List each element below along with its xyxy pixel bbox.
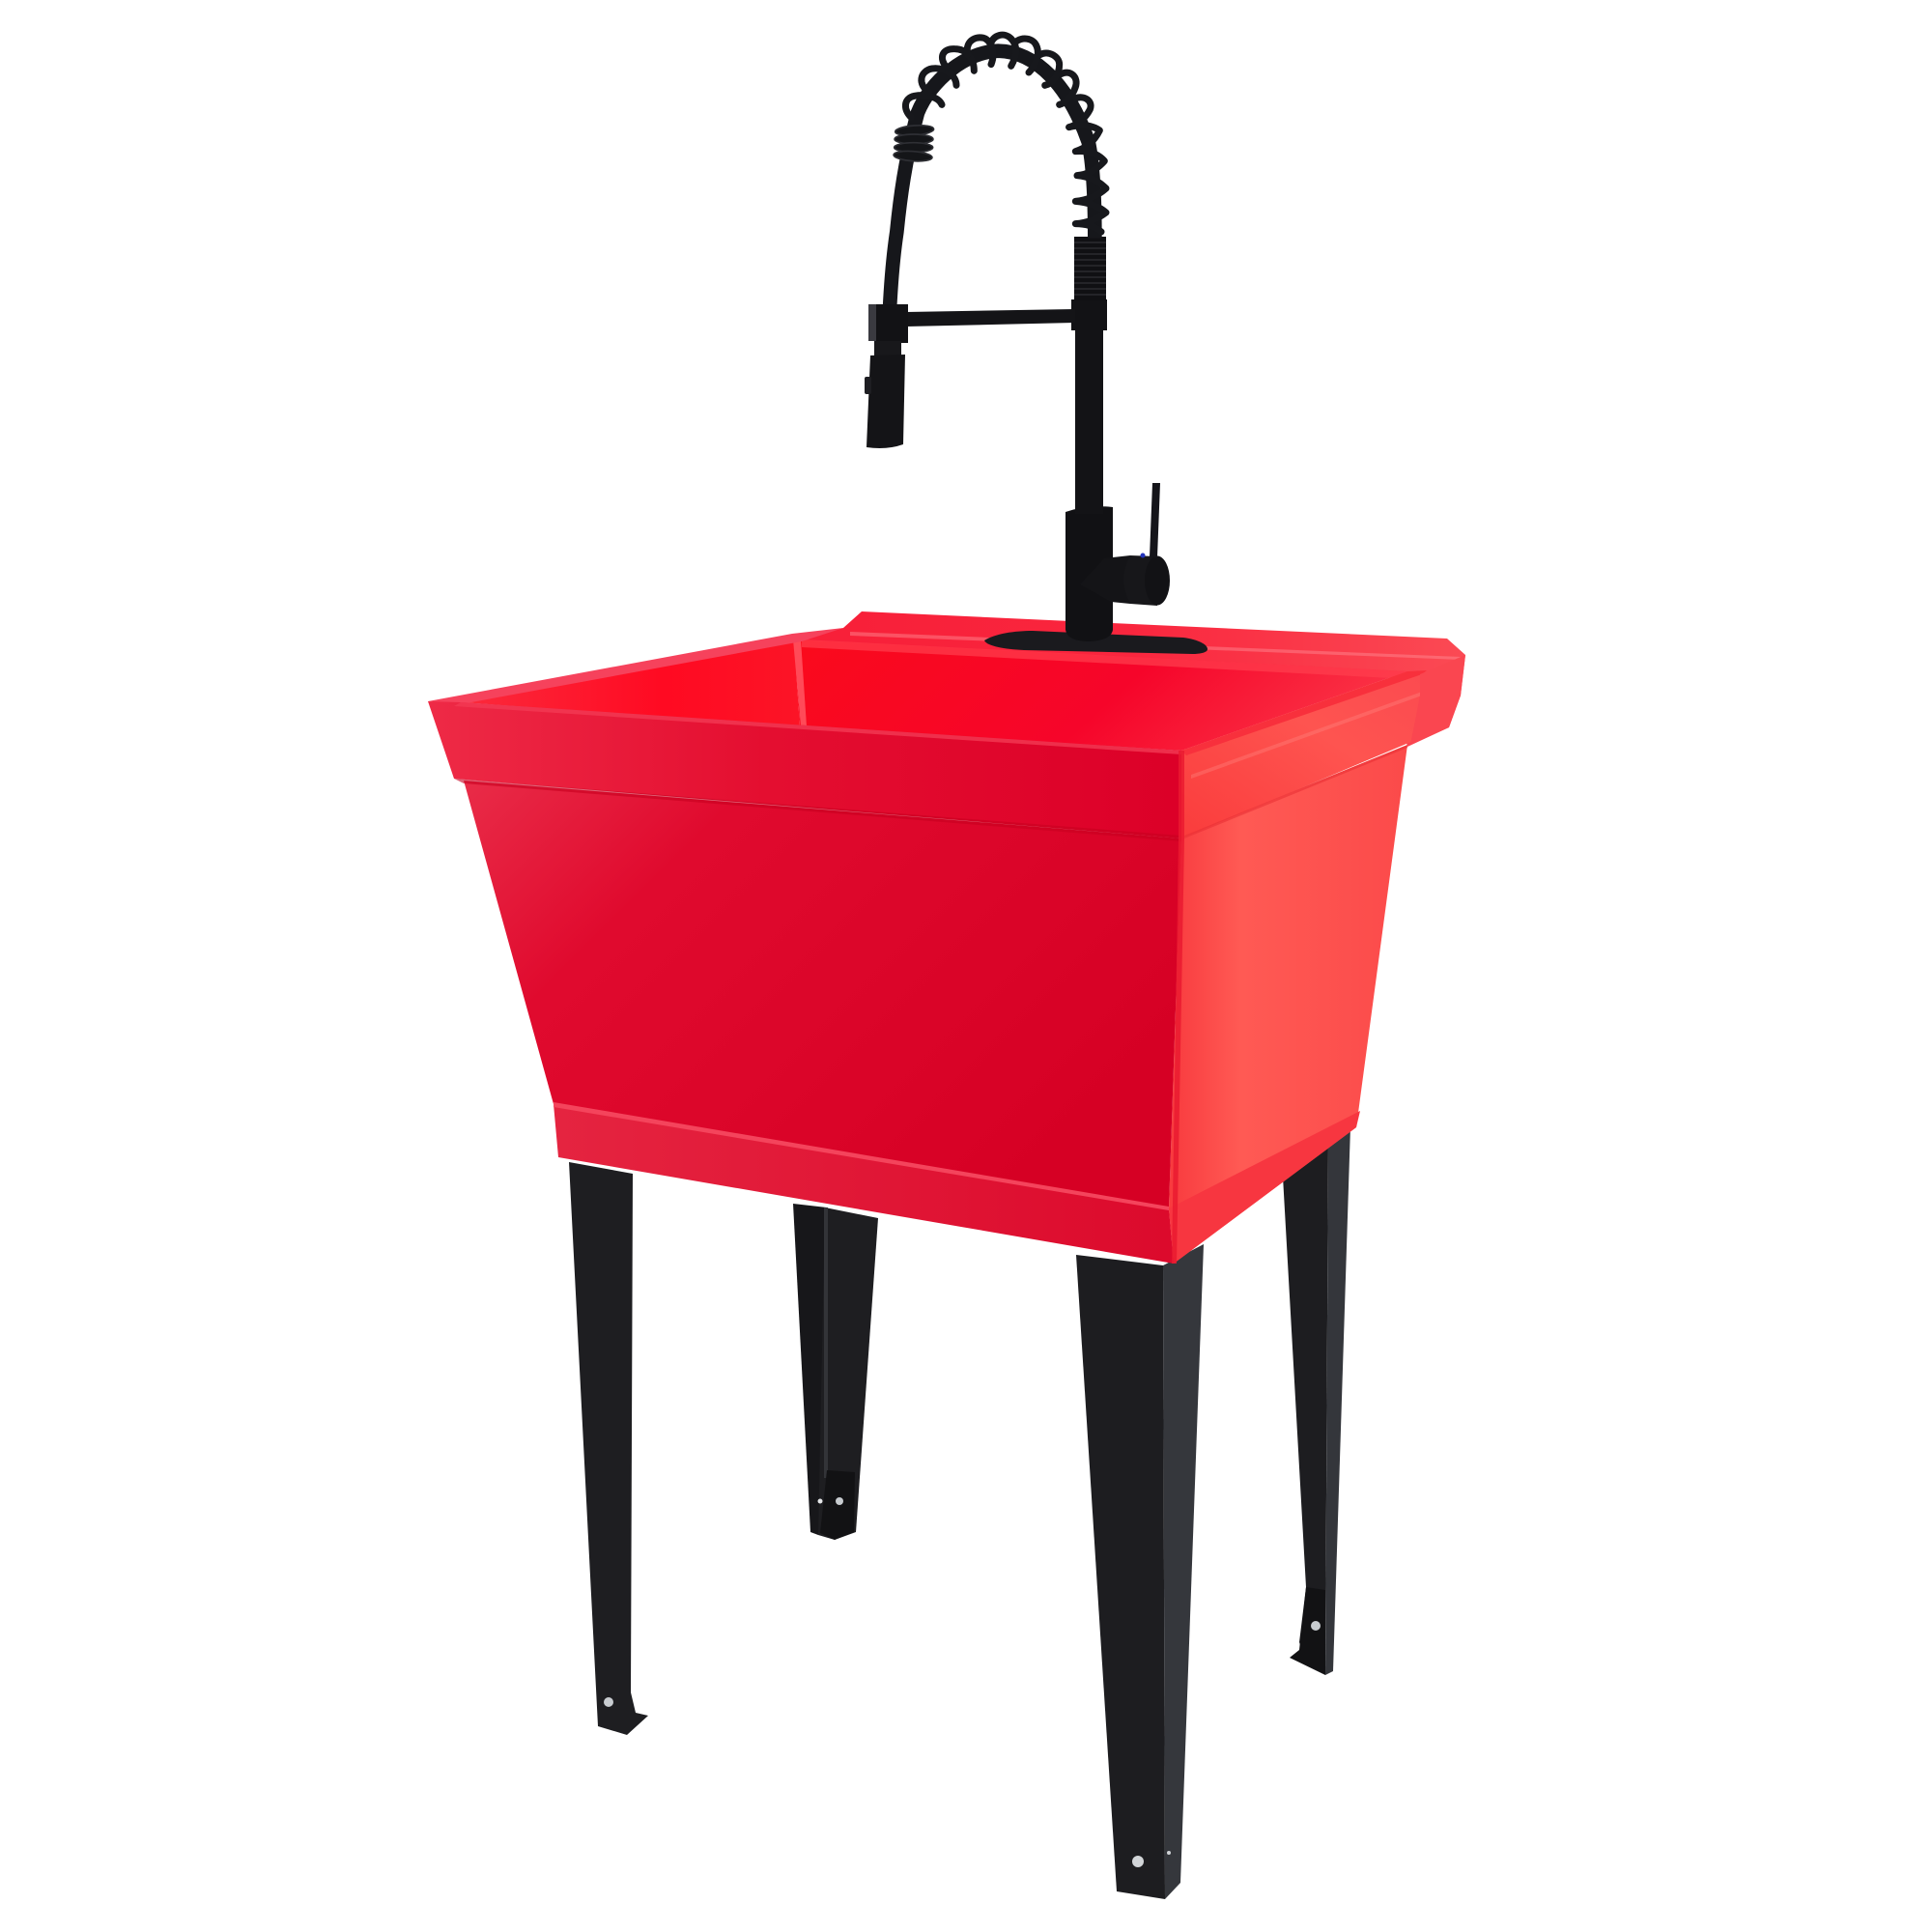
stem bbox=[1075, 328, 1103, 514]
back right leg bbox=[1283, 1126, 1350, 1675]
corner edge bbox=[1172, 751, 1184, 1264]
front right leg bbox=[1076, 1244, 1204, 1899]
tight coil on hose bbox=[894, 125, 934, 162]
lower band side bbox=[1169, 1111, 1360, 1264]
handle cylinder bbox=[1123, 555, 1170, 606]
right rim pale stripe bbox=[1191, 692, 1422, 779]
neck hose bbox=[890, 51, 1094, 309]
rim top left bbox=[428, 628, 843, 704]
front rim panel bbox=[428, 701, 1181, 838]
faucet bbox=[865, 35, 1208, 654]
ribbed spring base bbox=[1074, 237, 1106, 300]
front rim top highlight bbox=[454, 702, 1181, 754]
front body face bbox=[464, 781, 1181, 1208]
faucet base body bbox=[1065, 506, 1113, 641]
back ledge bbox=[794, 611, 1465, 747]
ledge pale highlight bbox=[850, 632, 1462, 660]
sprayer head bbox=[865, 355, 905, 448]
sink tub bbox=[428, 611, 1465, 1264]
back left leg bbox=[793, 1204, 878, 1540]
handle blue dot bbox=[1140, 553, 1146, 558]
handle lever bbox=[1150, 483, 1160, 557]
right body side bbox=[1169, 745, 1407, 1264]
handle connector bbox=[1080, 555, 1130, 604]
right rim panel bbox=[1181, 670, 1427, 838]
rim lower line bbox=[1184, 745, 1407, 838]
spring arches bbox=[905, 35, 1106, 232]
sprayer neck bbox=[874, 341, 901, 356]
lower band front bbox=[554, 1104, 1174, 1264]
inner back wall bbox=[794, 639, 1407, 751]
front left leg bbox=[569, 1162, 648, 1735]
stem collar bbox=[1071, 299, 1107, 330]
neck and spring coils bbox=[890, 35, 1106, 309]
band highlight bbox=[554, 1102, 1169, 1210]
crossbar bbox=[906, 309, 1075, 327]
inner corner highlight bbox=[793, 639, 807, 726]
wall top glow bbox=[802, 639, 1407, 678]
deck plate bbox=[984, 631, 1208, 654]
hose bracket bbox=[868, 304, 908, 343]
under-rim lip bbox=[454, 779, 1181, 841]
right rim top edge bbox=[1181, 670, 1427, 755]
inner left wall bbox=[461, 639, 800, 726]
rim right fold bbox=[1410, 655, 1465, 745]
